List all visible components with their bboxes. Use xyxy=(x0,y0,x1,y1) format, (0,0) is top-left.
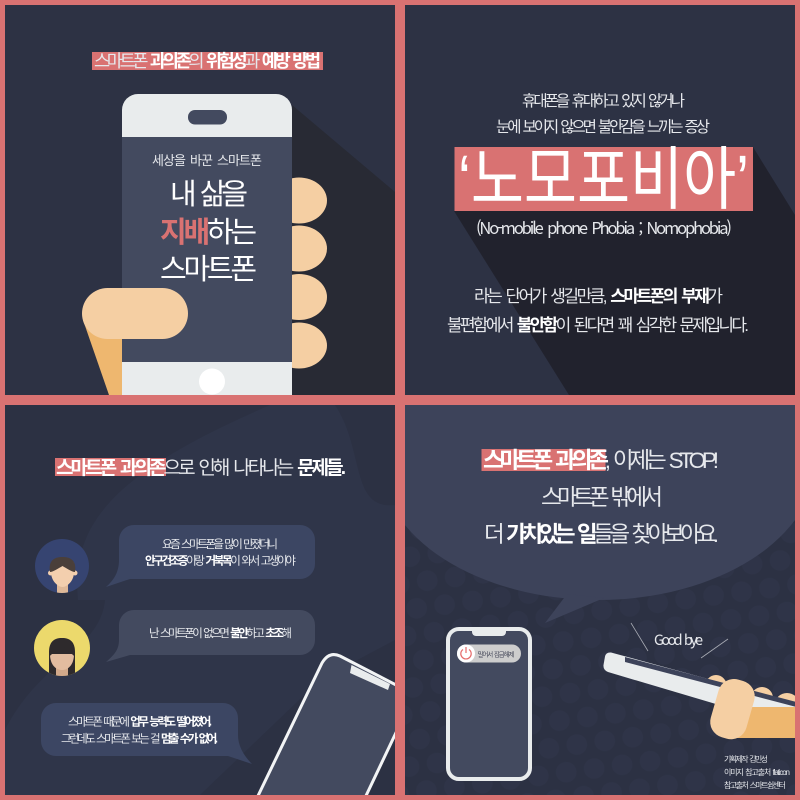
phone screen text: 내 삶을 xyxy=(170,179,248,211)
intro text: 휴대폰을 휴대하고 있지 않거나 xyxy=(522,92,685,110)
bubble: third message: 그런데도 스마트폰 보는 걸 멈출 수가 없어. xyxy=(61,732,218,746)
bubble: second message: 난 스마트폰이 없으면 불안하고 초조해 xyxy=(149,626,292,640)
icon: hand dropping phone xyxy=(603,652,800,743)
credits xyxy=(724,754,790,790)
icon: tilted phone xyxy=(256,655,402,800)
avatar: woman xyxy=(34,620,90,680)
panel: smartphone hero xyxy=(5,5,395,400)
icon: fingers behind phone xyxy=(292,178,327,368)
bubble: third message xyxy=(41,703,252,764)
intro text xyxy=(496,92,710,136)
icon: phone body xyxy=(122,94,292,400)
phone screen text xyxy=(152,153,262,286)
closing message: 더 가치있는 일들을 찾아보아요. xyxy=(484,522,719,547)
panel: nomophobia definition xyxy=(405,5,795,395)
phone screen text: 세상을 바꾼 스마트폰 xyxy=(152,153,262,168)
panel: problems conversation xyxy=(5,405,402,800)
phone screen text: 지배하는 xyxy=(160,216,257,249)
bubble: first message: 안구건조증이랑 거북목이 와서 고생이야 xyxy=(145,554,296,568)
intro text: 눈에 보이지 않으면 불안감을 느끼는 증상 xyxy=(496,118,710,136)
credits: 이미지 참고출처 flaticon xyxy=(724,767,790,777)
credits: 기획제작 김민성 xyxy=(724,754,768,764)
bubble: third message: 스마트폰 때문에 업무 능력도 떨어졌어. xyxy=(68,714,212,728)
speech bubble xyxy=(405,405,795,622)
credits: 참고출처 스마트쉼센터 xyxy=(724,780,786,790)
title highlight: 스마트폰 과의존의 위험성과 예방 방법 xyxy=(94,51,321,71)
bubble: first message: 요즘 스마트폰을 많이 만졌더니 xyxy=(162,537,278,551)
avatar: man xyxy=(35,539,89,597)
phone screen text: 스마트폰 xyxy=(160,254,257,286)
explanation text xyxy=(447,287,749,335)
bubble: second message xyxy=(106,610,315,662)
closing message xyxy=(482,448,719,547)
explanation text: 라는 단어가 생길만큼, 스마트폰의 부재가 xyxy=(474,287,723,306)
icon: locked phone: 밀어서 잠금해제 xyxy=(478,650,515,658)
icon: locked phone xyxy=(448,628,530,779)
icon: hand with thumb xyxy=(82,288,188,395)
closing message: 스마트폰 과의존, 이제는 STOP! xyxy=(483,448,719,473)
bubble: first message xyxy=(106,525,315,587)
explanation text: 불편함에서 불안함이 된다면 꽤 심각한 문제입니다. xyxy=(447,316,749,335)
heading: 스마트폰 과의존으로 인해 나타나는 문제들. xyxy=(56,457,346,479)
good bye label: Good bye xyxy=(654,629,703,650)
keyword banner: ‘노모포비아’ xyxy=(458,141,749,218)
english term: (No-mobile phone Phobia ; Nomophobia) xyxy=(476,215,732,239)
good bye label xyxy=(631,623,728,658)
closing message: 스마트폰 밖에서 xyxy=(541,485,663,510)
panel: stop overuse xyxy=(405,405,795,795)
